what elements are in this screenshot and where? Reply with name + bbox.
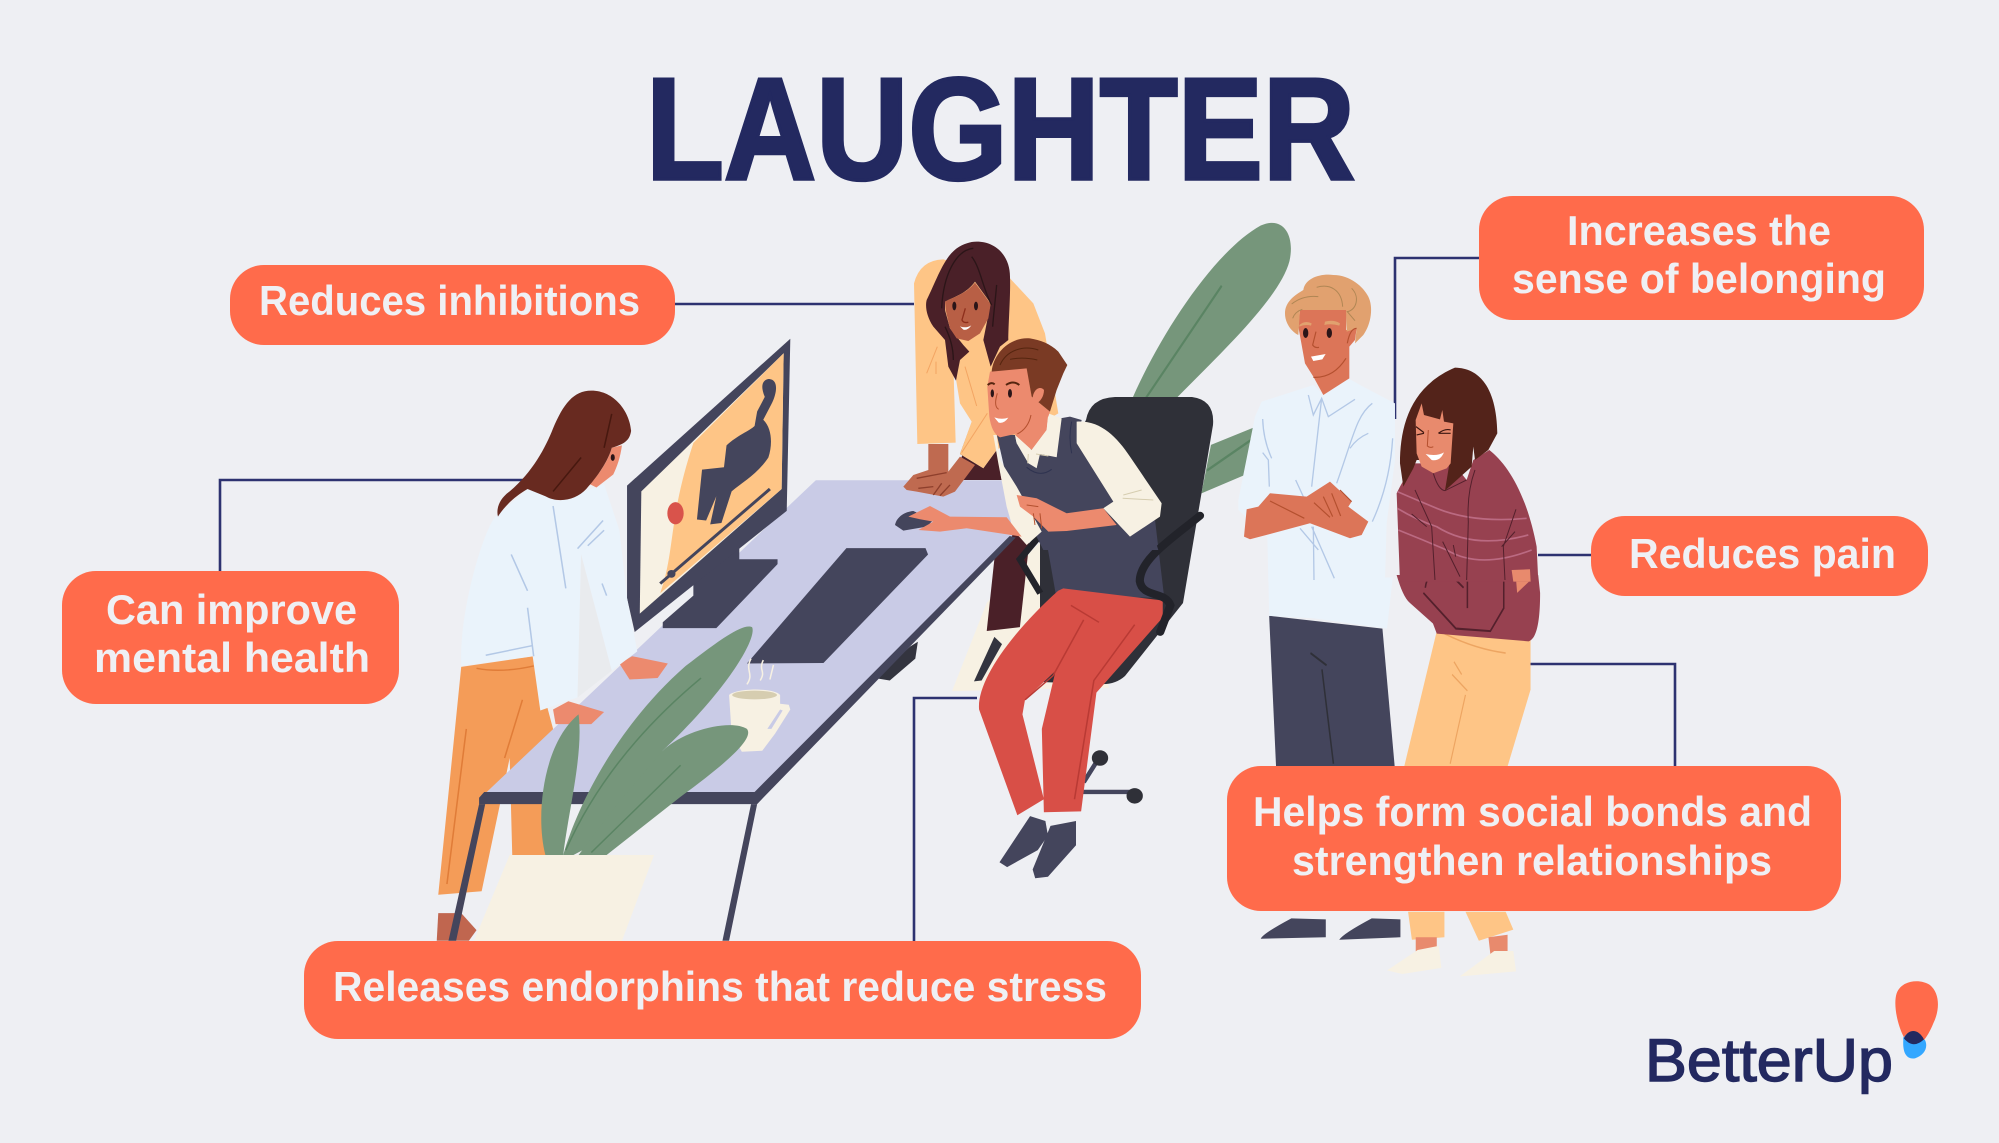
panel: can improve mental health bbox=[62, 571, 399, 704]
panel: increases sense of belonging: Increases the bbox=[1567, 207, 1831, 254]
figure: laughing woman in maroon sweater bbox=[1397, 368, 1538, 582]
panel: reduces inhibitions bbox=[230, 265, 675, 345]
icon: large plant behind chair bbox=[1133, 223, 1291, 493]
desk bbox=[448, 480, 1016, 941]
figure: seated man lower body bbox=[979, 516, 1200, 878]
title: LAUGHTER bbox=[646, 48, 1355, 210]
logo: BetterUp: BetterUp bbox=[1645, 1027, 1893, 1094]
panel: helps form social bonds: strengthen relationships bbox=[1292, 837, 1772, 884]
figure: laughing woman lower body bbox=[1387, 570, 1540, 977]
panel: can improve mental health: Can improve bbox=[106, 586, 357, 633]
panel: increases sense of belonging bbox=[1479, 196, 1924, 320]
monitor showing cat video bbox=[627, 339, 790, 632]
office chair bbox=[1040, 397, 1213, 804]
figure: standing man lower body bbox=[1261, 578, 1400, 940]
panel: reduces inhibitions: Reduces inhibitions bbox=[259, 277, 640, 324]
figure: woman with dark hair standing behind desk bbox=[903, 242, 1058, 497]
logo: BetterUp bbox=[1645, 981, 1938, 1094]
panel: releases endorphins bbox=[304, 941, 1141, 1039]
figure: seated man upper body bbox=[895, 338, 1162, 550]
keyboard bbox=[747, 548, 928, 664]
panel: releases endorphins: Releases endorphins that reduce stress bbox=[333, 963, 1107, 1010]
figure: lower body of woman behind desk bbox=[874, 535, 1109, 691]
panel: reduces pain: Reduces pain bbox=[1629, 530, 1896, 577]
figure: standing man with crossed arms bbox=[1238, 275, 1395, 582]
panel: helps form social bonds: Helps form social bonds and bbox=[1253, 788, 1812, 835]
panel: helps form social bonds bbox=[1227, 766, 1841, 911]
figure: woman in white top, upper body bbox=[461, 391, 668, 724]
figure: woman in white top, legs bbox=[437, 656, 553, 941]
coffee cup bbox=[729, 659, 790, 752]
panel: reduces pain bbox=[1591, 516, 1928, 596]
potted plant on desk bbox=[474, 627, 753, 941]
panel: can improve mental health: mental health bbox=[94, 634, 370, 681]
connector lines bbox=[220, 258, 1675, 941]
panel: increases sense of belonging: sense of belonging bbox=[1512, 255, 1886, 302]
